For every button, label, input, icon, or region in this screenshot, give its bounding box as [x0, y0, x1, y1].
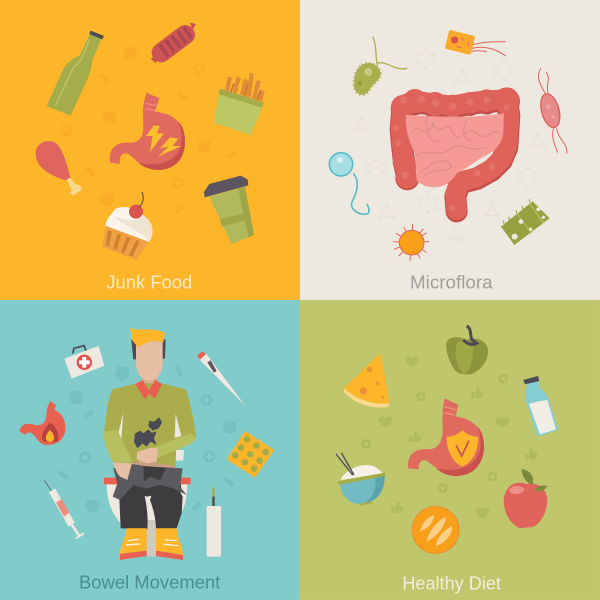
icon: bread loaf	[412, 506, 459, 554]
icon: stomach with flame	[19, 401, 65, 445]
icon: cupcake	[102, 192, 153, 260]
icon: beer bottle	[47, 31, 104, 116]
panel: healthy diet	[300, 300, 600, 600]
icon: rice bowl	[336, 453, 385, 506]
icon: sausage	[151, 23, 196, 63]
icon: bell pepper	[446, 326, 488, 374]
stomach ache mark	[134, 417, 162, 448]
icon: blue spore	[329, 153, 369, 214]
trousers	[113, 464, 187, 529]
icon: french fries	[214, 73, 264, 135]
icon: thermometer	[197, 351, 245, 405]
icon: large and small intestine	[390, 87, 520, 222]
panel: junk food	[0, 0, 300, 300]
icon: stomach with shield	[408, 398, 484, 476]
icon: cheese wedge	[344, 353, 389, 408]
heading: Junk Food	[106, 271, 192, 292]
icon: blister pack	[227, 431, 274, 478]
icon: man on toilet	[104, 328, 196, 560]
heading: Microflora	[410, 271, 493, 292]
toilet	[104, 450, 191, 557]
icon: bottle with needle	[207, 487, 221, 557]
icon: stomach with lightning	[110, 93, 185, 170]
icon: orange virus	[393, 224, 429, 261]
icon: chicken drumstick	[36, 141, 82, 195]
shoes	[120, 528, 183, 560]
icon: milk bottle	[523, 376, 558, 437]
panel: microflora	[300, 0, 600, 300]
icon: green bacterium	[354, 37, 407, 95]
hands	[113, 448, 158, 480]
heading: Bowel Movement	[79, 572, 220, 593]
panel: bowel movement	[0, 300, 300, 600]
icon: pink bacterium	[537, 68, 567, 154]
heading: Healthy Diet	[402, 572, 501, 593]
icon: orange bacterium	[445, 30, 506, 56]
icon: coffee cup	[204, 176, 254, 244]
icon: syringe	[44, 480, 84, 538]
icon: first aid kit	[64, 346, 104, 379]
icon: green cell cluster	[501, 199, 550, 245]
icon: apple	[504, 469, 547, 528]
head	[129, 328, 166, 383]
waistband	[132, 461, 175, 469]
sweater	[104, 380, 196, 467]
